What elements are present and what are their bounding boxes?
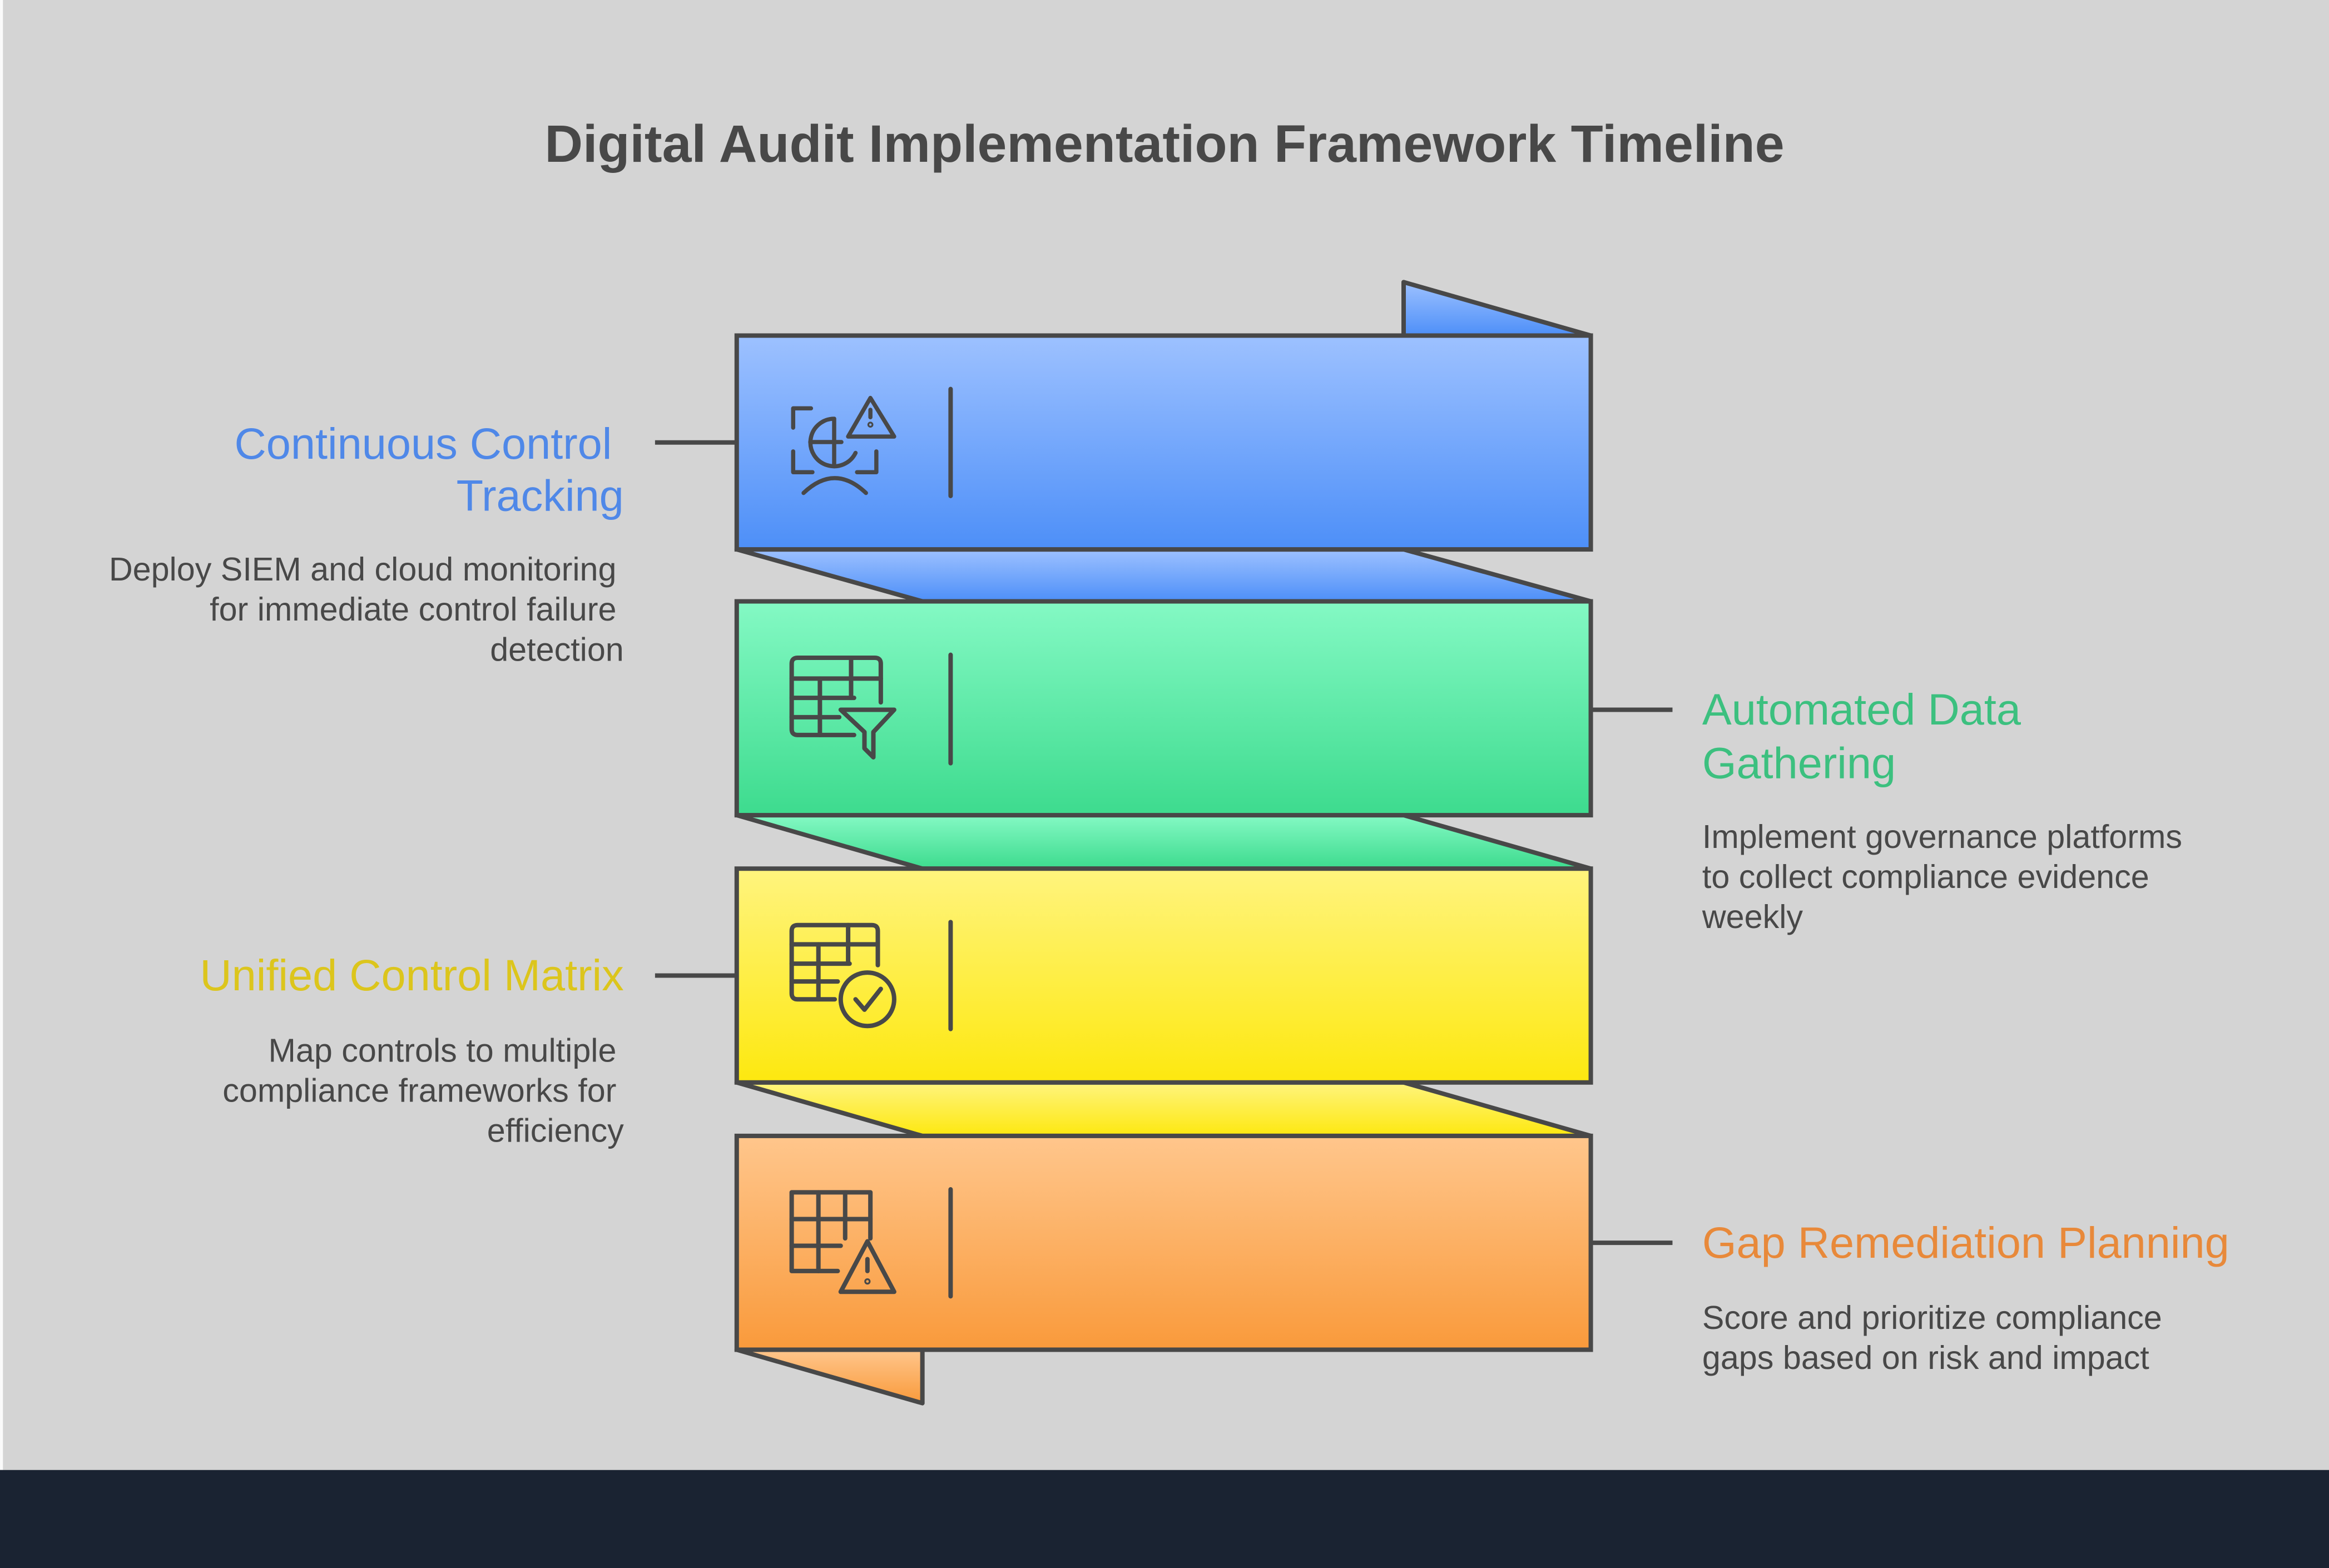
text block: continuous control tracking: Deploy SIEM and cloud monitoring bbox=[109, 550, 616, 588]
panel: automated data gathering bbox=[737, 602, 1591, 815]
panel: continuous control tracking bbox=[737, 336, 1591, 549]
text block: unified control matrix bbox=[200, 950, 624, 1149]
text block: continuous control tracking: detection bbox=[490, 631, 624, 668]
text block: automated data gathering: Implement governance platforms bbox=[1702, 818, 2182, 855]
icon: table with filter bbox=[792, 658, 894, 757]
connector lines bbox=[655, 443, 1672, 1243]
text block: gap remediation planning: Gap Remediation Planning bbox=[1702, 1218, 2229, 1267]
text block: gap remediation planning bbox=[1702, 1218, 2229, 1376]
connector tab: bottom bbox=[737, 1349, 923, 1403]
title: Digital Audit Implementation Framework Timeline bbox=[544, 115, 1785, 173]
text block: unified control matrix: efficiency bbox=[487, 1112, 624, 1149]
text block: unified control matrix: compliance frameworks for bbox=[222, 1071, 616, 1109]
text block: gap remediation planning: Score and prioritize compliance bbox=[1702, 1299, 2162, 1336]
text block: gap remediation planning: gaps based on risk and impact bbox=[1702, 1339, 2149, 1376]
text block: continuous control tracking: Tracking bbox=[457, 471, 624, 520]
text block: unified control matrix: Unified Control Matrix bbox=[200, 950, 624, 1000]
connector: green to yellow bbox=[737, 815, 1591, 869]
text block: automated data gathering bbox=[1702, 684, 2182, 935]
text block: continuous control tracking: for immediate control failure bbox=[210, 591, 616, 628]
connector tab: top bbox=[1404, 282, 1591, 336]
text block: unified control matrix: Map controls to multiple bbox=[269, 1031, 616, 1069]
text block: continuous control tracking bbox=[109, 419, 624, 668]
connector: yellow to orange bbox=[737, 1083, 1591, 1136]
icon: table with check bbox=[792, 925, 894, 1026]
panel: gap remediation planning bbox=[737, 1136, 1591, 1349]
connector: blue to green bbox=[737, 549, 1591, 602]
text block: automated data gathering: to collect compliance evidence bbox=[1702, 858, 2149, 895]
text block: automated data gathering: Automated Data bbox=[1702, 684, 2021, 734]
icon: grid with warning bbox=[792, 1192, 894, 1292]
text block: continuous control tracking: Continuous Control bbox=[235, 419, 612, 468]
text block: automated data gathering: Gathering bbox=[1702, 738, 1896, 787]
icon: globe monitoring with warning bbox=[793, 398, 894, 493]
panel: unified control matrix bbox=[737, 869, 1591, 1083]
text block: automated data gathering: weekly bbox=[1702, 898, 1803, 935]
